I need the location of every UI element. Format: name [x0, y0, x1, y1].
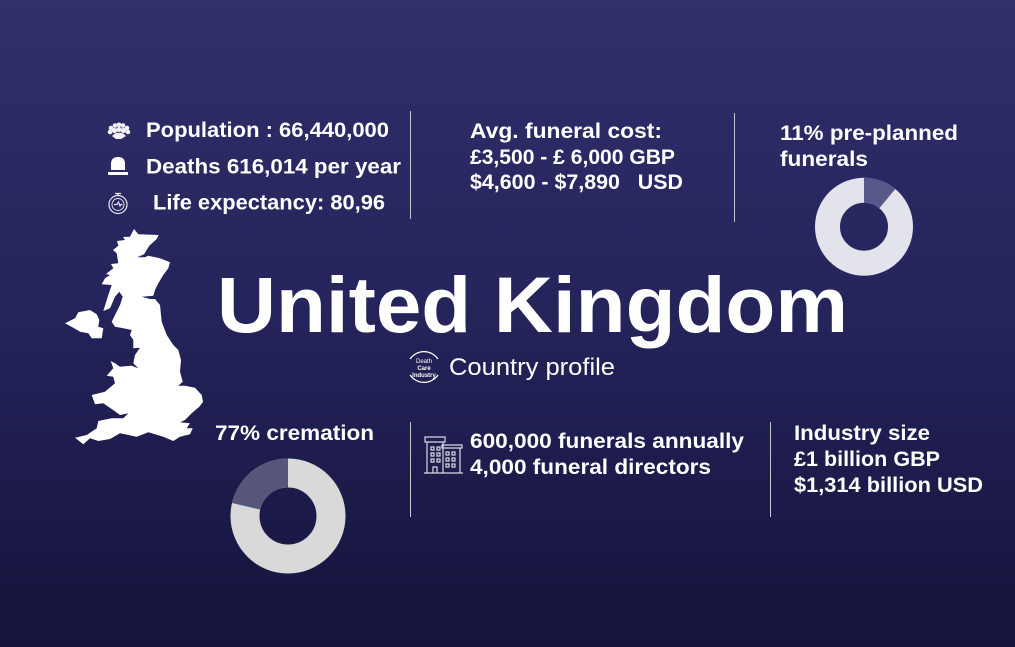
chart: 77% donut — [245, 473, 331, 559]
panel: key statistics — [108, 119, 401, 214]
text: life expectancy: Life expectancy: 80,96 — [153, 192, 385, 214]
icon: Death Care Industry logo: Death — [416, 359, 432, 365]
chart: 11% donut — [828, 190, 900, 263]
panel: funerals and directors — [424, 430, 744, 479]
text: pre-planned label second line: funerals — [780, 148, 868, 171]
text: industry size heading: Industry size — [794, 422, 930, 445]
text: deaths: Deaths 616,014 per year — [146, 156, 401, 178]
text: population: Population : 66,440,000 — [146, 119, 389, 142]
panel: pre-planned funerals — [780, 122, 958, 263]
text: size in GBP: £1 billion GBP — [794, 448, 940, 471]
icon: office buildings — [424, 437, 463, 473]
panel: funeral cost — [470, 120, 683, 194]
icon: memorial headstone — [108, 157, 128, 175]
text: cost in GBP: £3,500 - £ 6,000 GBP — [470, 146, 675, 169]
text: cremation label: 77% cremation — [215, 422, 374, 445]
icon: Death Care Industry logo: Care — [417, 366, 431, 372]
text: funerals annually: 600,000 funerals annually — [470, 430, 744, 453]
text: funeral directors: 4,000 funeral directors — [470, 456, 711, 479]
icon: Death Care Industry logo — [410, 352, 438, 382]
panel: industry size — [794, 422, 983, 497]
panel: country profile subtitle — [410, 352, 615, 382]
icon: heart stopwatch — [109, 194, 127, 214]
panel: cremation — [215, 422, 374, 559]
icon: population crowd — [108, 122, 130, 139]
icon: Death Care Industry logo: Industry — [412, 373, 436, 379]
title: United Kingdom — [217, 260, 848, 349]
text: size in USD: $1,314 billion USD — [794, 474, 983, 497]
text: pre-planned label: 11% pre-planned — [780, 122, 958, 145]
text: cost heading: Avg. funeral cost: — [470, 120, 662, 143]
icon: map of the United Kingdom — [65, 229, 203, 444]
text: cost in USD: $4,600 - $7,890 USD — [470, 171, 683, 194]
text: country profile: Country profile — [449, 354, 615, 381]
